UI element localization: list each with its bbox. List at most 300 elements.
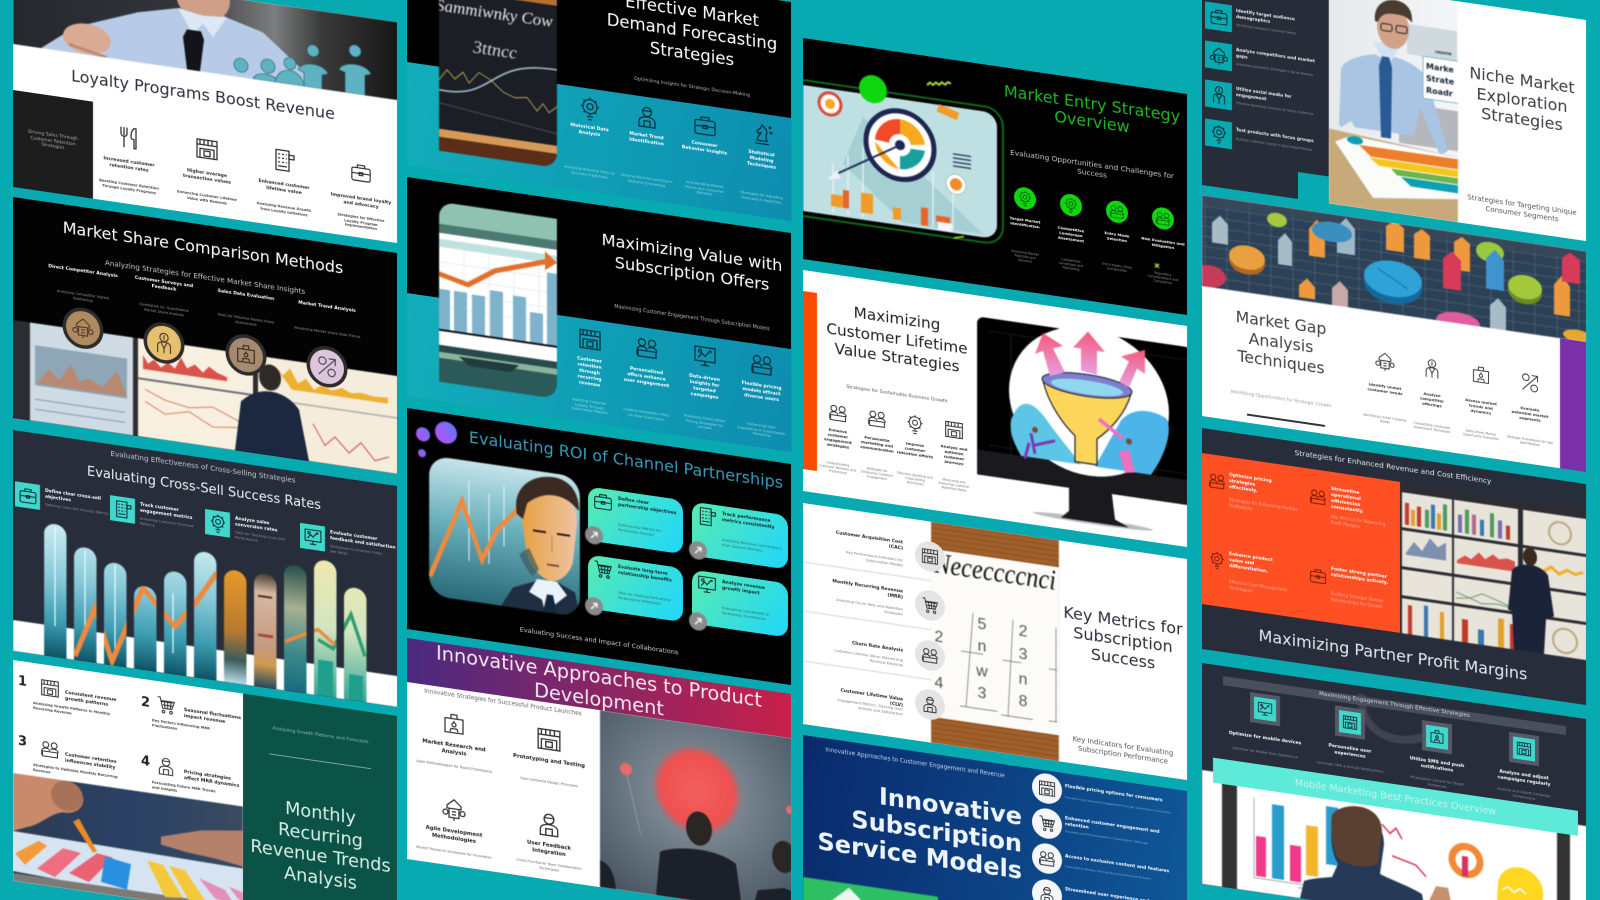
teal title band xyxy=(1213,758,1578,836)
decorative purple circles xyxy=(415,420,458,458)
item: market segments: segments xyxy=(1519,415,1541,423)
item: define objectives: Define clear cross-sell objectives xyxy=(45,489,101,503)
item: personalized offers: for New Subscribers xyxy=(628,412,665,422)
item: prototyping: Prototyping and Testing xyxy=(513,753,585,770)
item: customer lifetime value xyxy=(256,148,312,217)
item: user feedback: Cross-Functional Team Collaboration Techniques xyxy=(516,857,582,872)
method: sales data: Tools for Effective Market Share Assessment xyxy=(218,312,274,327)
item 1 xyxy=(18,674,116,716)
item: higher transaction value: Enhancing Customer Lifetime Value with Rewards xyxy=(177,189,237,205)
item: market trend: Market Trend xyxy=(629,132,664,142)
item: market segments: potential market xyxy=(1512,409,1548,419)
item: analyze journeys: Analyze and optimize customer journeys xyxy=(941,443,967,466)
item: optimize pricing: Strategies for Enhancing Partner Profitability xyxy=(1229,497,1297,512)
item: user feedback xyxy=(516,814,582,872)
photo: man with financial chart xyxy=(428,457,581,616)
method: direct competitor: Direct Competitor Analysis xyxy=(48,264,118,279)
title: Maximizing xyxy=(854,303,940,334)
item: customer lifetime value: Analyzing Revenue Growth from Loyalty Initiatives xyxy=(257,201,311,217)
panel: Market Gap Analysis Techniques slide xyxy=(1202,195,1586,472)
card: track metrics xyxy=(692,502,788,570)
item: retention: Customer xyxy=(577,356,602,365)
item: streamline efficiencies: Streamline operational efficiencies consistently. xyxy=(1331,487,1364,514)
item: unmet needs xyxy=(1361,346,1409,433)
subtitle: Strategies for Targeting Unique Consumer Segments xyxy=(1467,193,1577,223)
item 3: 3 xyxy=(18,734,27,750)
item: personalized offers: Personalized xyxy=(630,367,663,377)
item: mobile devices: Optimize for Mobile User Experience xyxy=(1232,746,1298,760)
item: fosters relationships: Foster strong partner relationships actively. xyxy=(1331,567,1388,586)
item: analyze conversion: Analyze sales conversion rates xyxy=(235,516,277,533)
item: mobile devices: Optimize for mobile devices xyxy=(1229,731,1301,747)
item: retention: retention xyxy=(577,362,602,371)
method: direct competitor: Analyzing Competitor Market Positioning xyxy=(57,289,109,303)
item: personalize: experiences xyxy=(1334,750,1366,760)
item: competitor offerings xyxy=(1408,353,1456,440)
metric: CLV xyxy=(805,665,946,731)
item: retention: through xyxy=(579,368,600,376)
item: increased retention xyxy=(99,126,159,195)
panel: Loyalty Programs Boost Revenue slide xyxy=(13,0,397,243)
teal corner block xyxy=(1298,172,1329,204)
teal lower band xyxy=(407,293,792,452)
chart: pill bars filled with photo xyxy=(13,523,398,707)
item: market trends: Data-Driven Market Opportunity Evaluation xyxy=(1463,428,1499,441)
item: higher transaction value xyxy=(177,138,237,205)
item: enhance product: Enhance product value and differentiation. xyxy=(1229,552,1273,574)
metric: CAC: Customer Acquisition Cost (CAC) xyxy=(836,531,903,551)
title: Niche Market Exploration Strategies xyxy=(1469,63,1575,134)
item: market trend xyxy=(620,106,672,188)
item: data-driven: Pricing Strategies for xyxy=(686,418,723,428)
item: market segments: Evaluate xyxy=(1520,405,1540,413)
item: agile development: Agile Development Methodologies xyxy=(426,825,482,845)
panel: Market Entry Strategy Overview slide xyxy=(803,38,1187,315)
card: growth impact: Evaluating Cost-Benefit of Partnership Investments xyxy=(722,606,769,621)
photo: man viewing chart wall xyxy=(13,320,398,474)
item: personalized offers: offers enhance xyxy=(627,372,666,383)
title xyxy=(803,772,1022,885)
metric: churn xyxy=(805,616,946,682)
title: Demand Forecasting xyxy=(607,10,777,54)
item: brand loyalty: Implementation xyxy=(345,223,377,231)
item: track engagement xyxy=(110,495,194,528)
item: data-driven: campaigns xyxy=(691,391,718,400)
metric: churn: Churn Rate Analysis xyxy=(852,641,903,654)
item: statistical modeling xyxy=(740,124,783,205)
photo: 3D chart blocks on circuit board xyxy=(1202,195,1587,342)
item: competitor offerings: Analyze xyxy=(1423,391,1441,398)
item: market trends: dynamics xyxy=(1471,408,1491,416)
item: target market: Assessing Market Potential and Demand xyxy=(1011,249,1039,264)
side panel with subtitle: Driving Sales Through Customer Retention Strategies xyxy=(28,130,78,151)
right panel: Analyzing Growth Patterns and Forecasts xyxy=(272,726,369,745)
teal lower band xyxy=(407,62,792,221)
item 2: Key Factors Influencing MRR Fluctuations xyxy=(152,718,210,731)
panel: Maximizing Value with Subscription Offers slide xyxy=(407,177,791,452)
panel: Niche Market Exploration Strategies slide xyxy=(1202,0,1586,241)
title: Customer Lifetime xyxy=(826,319,968,357)
subtitle: Key Indicators for Evaluating Subscription Performance xyxy=(1073,735,1173,765)
item 1: Consistent revenue growth patterns xyxy=(65,691,116,708)
item: personalize marketing: Strategies for Enhancing Customer Engagement xyxy=(861,466,893,481)
item: analyze competitors: Analyze competitors and market gaps xyxy=(1236,48,1315,64)
title: Market Share Comparison Methods xyxy=(63,218,343,278)
photo: man with strategy roadmap xyxy=(1329,0,1458,222)
item: personalized offers: user engagement xyxy=(624,378,669,389)
photo: handwritten table on wood desk: 8 xyxy=(1019,692,1027,711)
item: entry mode xyxy=(1096,196,1138,284)
title: Evaluating Cross-Sell Success Rates xyxy=(87,464,321,513)
photo: hand with pencil on bar chart xyxy=(13,772,244,900)
item: personalize marketing: Personalize marketing and communication xyxy=(860,434,894,454)
item: flexible pricing: models attract xyxy=(742,387,781,398)
item: historical data: Analysis xyxy=(579,130,600,138)
item: entry mode: Entry Mode Selection xyxy=(1104,230,1130,243)
item: competitive landscape xyxy=(1050,189,1092,277)
card: track metrics: Track performance metrics consistently xyxy=(722,512,775,530)
illustration: target dartboard with arrow xyxy=(803,74,1005,244)
item: brand loyalty: Loyalty Program xyxy=(344,218,378,227)
method: customer surveys xyxy=(134,275,194,364)
right panel: Monthly xyxy=(285,799,356,829)
item: enhance product xyxy=(1208,549,1303,605)
card: define objectives: Define clear partnership objectives xyxy=(618,497,676,516)
item: risk evaluation: Regulatory Considerations and Compliance xyxy=(1148,271,1178,286)
method: sales data xyxy=(218,288,274,376)
item 2 xyxy=(141,695,242,731)
metric: CLV: Customer Lifetime Value (CLV) xyxy=(841,688,903,708)
photo: man with strategy roadmap: Roadr xyxy=(1426,86,1453,99)
item: evaluate feedback: Evaluate customer feedback and satisfaction xyxy=(330,530,396,551)
item: target market: Target Market Identification xyxy=(1010,215,1040,230)
right panel: Analysis xyxy=(284,863,357,894)
item: data-driven: targeted xyxy=(693,386,716,394)
item: consumer behavior: Behavior xyxy=(697,191,712,197)
item: analyze campaigns: Analyze and adjust xyxy=(1499,770,1549,782)
item: prototyping: User-Centered Design Principles xyxy=(520,776,578,789)
item: target demographics: Identifying Untapped Consumer Needs xyxy=(1236,23,1296,36)
item: social media xyxy=(1205,79,1327,124)
item: personalize marketing xyxy=(858,404,896,500)
item: unmet needs: Identify unmet customer needs xyxy=(1367,381,1403,396)
item 4 xyxy=(141,754,240,794)
item: fosters relationships xyxy=(1309,564,1397,618)
teal title band: Mobile Marketing Best Practices Overview xyxy=(1295,778,1496,818)
item: statistical modeling: Statistical xyxy=(748,150,775,159)
panel: Effective Market Demand Forecasting slide xyxy=(407,0,791,221)
item 3 xyxy=(18,734,118,779)
photo: handwritten table on wood desk: 4 xyxy=(935,673,943,692)
item: competitor offerings: offerings xyxy=(1422,401,1442,408)
item: market segments xyxy=(1506,367,1554,454)
item: consumer behavior: Behavior Insights xyxy=(682,145,727,157)
panel: Evaluating Cross-Sell Success Rates slide xyxy=(13,430,397,707)
metric: churn: Customer Lifetime Value: Maximizing Revenue Potential xyxy=(834,649,903,667)
item: market research: Market Research and Analysis xyxy=(422,738,486,758)
accent bar xyxy=(803,291,817,471)
item: competitive landscape: Competitive Landscape Assessment xyxy=(1058,225,1084,244)
photo: businessman with teal people figures xyxy=(13,0,398,101)
item: higher transaction value: Higher average transaction values xyxy=(183,169,231,186)
item: improve retention: Effective Upselling and Cross-Selling Techniques xyxy=(897,471,933,487)
photo: handwritten table on wood desk: w xyxy=(975,661,988,681)
item 2: 2 xyxy=(141,695,150,711)
subtitle: Maximizing Customer Engagement Through Subscription Models xyxy=(614,305,770,332)
panel: Market Share Comparison Methods slide xyxy=(13,197,397,474)
item: user feedback: Integration xyxy=(532,847,566,858)
card: track metrics: Analyzing Revenue Contributions from Channel Partners xyxy=(722,538,782,553)
method: market trend: Market Trend Analysis xyxy=(298,301,356,314)
title: Market Gap Analysis Techniques xyxy=(1236,307,1326,378)
item: customer lifetime value: Enhanced customer lifetime value xyxy=(258,179,310,196)
item: social media: Effective Marketing Channels for Niche Audiences xyxy=(1236,101,1313,116)
orange panel xyxy=(1202,453,1400,633)
item: evaluate feedback: Techniques to Improve Cross-Sell Rates xyxy=(330,544,383,556)
card: growth impact: Analyze revenue growth impact xyxy=(722,580,765,596)
subtitle: Evaluating Effectiveness of Cross-Selling Strategies xyxy=(110,449,296,485)
item: risk evaluation: Risk Evaluation and Mitigation xyxy=(1141,235,1185,250)
item: flexible pricing: Marketing xyxy=(753,432,770,438)
item: target demographics xyxy=(1205,1,1327,46)
title xyxy=(812,297,982,380)
item: prototyping xyxy=(513,728,585,789)
item: focus groups: Building Customer Loyalty in Specialized Markets xyxy=(1236,137,1312,152)
item: consumer behavior: Incorporating Market xyxy=(686,180,723,189)
item: analyze conversion xyxy=(204,509,285,542)
item: target market xyxy=(1004,182,1046,270)
item: retention: Boosting Customer xyxy=(572,397,607,406)
item: personalized offers: Crafting Irresistible Offers xyxy=(623,407,670,418)
item: statistical modeling: Strategies for Adjusting Forecasts in Real-Time xyxy=(740,190,783,205)
item: competitor offerings: Competitive Landscape Assessment Techniques xyxy=(1414,421,1450,434)
metric: CAC xyxy=(805,517,946,583)
star decoration xyxy=(948,229,1163,301)
photo: man with strategy roadmap: Strate xyxy=(1426,74,1455,87)
method: sales data: Sales Data Evaluation xyxy=(218,289,274,302)
item: enhance product: Effective Cost Management Techniques xyxy=(1229,579,1287,593)
photo: handwritten table on wood desk: 2 xyxy=(935,627,943,646)
photo: man with strategy roadmap: CREATIN xyxy=(1435,50,1452,56)
photo: handwritten table on wood desk: 5 xyxy=(978,615,986,634)
item: agile development xyxy=(416,798,492,860)
item 1: 1 xyxy=(18,674,27,690)
card: long-term benefits: Evaluate long-term relationship benefits xyxy=(618,565,672,584)
item: flexible pricing: Enhancing User xyxy=(747,422,776,430)
item: flexible pricing: Experience in Subscription xyxy=(738,425,785,436)
photo: handwritten table on wood desk: 3 xyxy=(978,684,986,703)
photo: man with strategy roadmap: Marke xyxy=(1426,62,1454,75)
item: competitive landscape: Competitive Landscape and Positioning xyxy=(1059,257,1083,272)
photo: handwritten table on wood desk: n xyxy=(1019,670,1027,689)
item: historical data: Analyzing Historical Data for Accurate Predictions xyxy=(564,164,615,179)
card: long-term benefits: Tools for Tracking Partnership Performance Effectively xyxy=(618,591,671,606)
card: define objectives xyxy=(588,486,683,554)
item: statistical modeling: Modeling xyxy=(750,156,773,165)
accent bar xyxy=(1560,338,1587,472)
metric: MRR xyxy=(805,566,946,632)
item 4: Pricing strategies affect MRR dynamics xyxy=(184,770,239,789)
item: retention: Subscription Models xyxy=(571,406,608,416)
title: Key Metrics for Subscription Success xyxy=(1063,602,1183,673)
item: enhance engagement: Enhance customer engagement strategies xyxy=(824,427,852,450)
subtitle: Evaluating Opportunities and Challenges for Success xyxy=(1010,148,1174,181)
right panel: Revenue Trends xyxy=(250,837,391,877)
feature: customer engagement: Enhanced customer engagement and retention xyxy=(1065,816,1159,835)
dark left panel xyxy=(1202,0,1329,204)
item: consumer behavior: Trends and Consumer xyxy=(685,184,724,194)
metric: CLV: Engagement Metrics: Tracking User Activity and Satisfaction xyxy=(838,698,903,716)
item: SMS and push: Audiences xyxy=(1428,782,1446,789)
top banner xyxy=(1223,676,1566,735)
item: brand loyalty: Strategies for Effective xyxy=(337,212,384,223)
item: enhance engagement: Understanding Customer Behavior and Preferences xyxy=(820,460,856,475)
item: entry mode: Entry Modes, Risks and Benefits xyxy=(1102,261,1132,273)
item: analyze conversion: Tools for Tracking Cross-Sell Performance xyxy=(235,530,285,542)
title: Strategies xyxy=(650,38,734,69)
method: market trend: Visualizing Market Share Data Trends xyxy=(294,326,360,339)
item: flexible pricing xyxy=(738,354,786,438)
arrow buttons xyxy=(584,526,708,632)
item: personalized offers xyxy=(623,338,670,422)
illustration: monitor with bar chart and arrow xyxy=(438,202,558,398)
method: market trend xyxy=(294,300,360,388)
subtitle: Strategies for Enhanced Revenue and Cost Efficiency xyxy=(1295,448,1491,486)
metric: CAC: Key Performance Indicators for Subscription Models xyxy=(846,550,903,567)
item: consumer behavior: Consumer xyxy=(692,141,717,149)
item: agile development: Market Research Strategies for Innovation xyxy=(416,845,492,860)
photo: handwritten table on wood desk: 3 xyxy=(1019,645,1027,664)
item: track engagement: Analyzing Customer Purchase Patterns xyxy=(140,517,194,528)
divider line xyxy=(1247,414,1325,427)
title: Maximizing Value with Subscription Offers xyxy=(602,229,782,294)
item 4: 4 xyxy=(141,754,150,770)
item: market trends xyxy=(1457,360,1505,447)
item: consumer behavior xyxy=(682,116,728,197)
card: define objectives: Defining Key Metrics for Partnership Success xyxy=(618,523,661,537)
item 1: Analyzing Growth Patterns in Monthly Recurring Revenue xyxy=(33,701,110,716)
item: enhance engagement xyxy=(819,398,857,494)
feature: customer engagement: Flexibility and Personalization in Subscription Offerings xyxy=(1065,829,1148,845)
panel: Maximizing Partner Profit Margins slide xyxy=(1202,428,1586,705)
item: market trend: Utilizing Machine Learning in Demand Forecasting xyxy=(621,172,672,188)
item: evaluate feedback xyxy=(300,522,396,556)
panel: Innovative Subscription Service Models slide xyxy=(803,735,1187,900)
title: Innovative xyxy=(879,782,1022,831)
item: historical data: Historical Data xyxy=(570,123,609,134)
item 2: Seasonal fluctuations impact revenue xyxy=(184,708,241,725)
item: brand loyalty xyxy=(330,164,392,231)
item: optimize pricing: Optimize pricing strategies effectively. xyxy=(1229,473,1272,494)
item: market research xyxy=(416,713,492,774)
item: personalize: Leverage SMS and Push Notifications xyxy=(1317,760,1383,774)
item: target demographics: Identify target audience demographics xyxy=(1236,9,1295,24)
item: SMS and push: Personalize Content for Target xyxy=(1410,775,1464,786)
title: Service Models xyxy=(818,827,1022,885)
item: risk evaluation xyxy=(1141,202,1185,291)
method: customer surveys: Customer Surveys and Feedback xyxy=(135,276,193,293)
item: market trend: Identification xyxy=(629,137,664,147)
card: long-term benefits xyxy=(588,554,683,622)
item: SMS and push xyxy=(1396,716,1478,794)
item: SMS and push: notifications xyxy=(1421,764,1453,774)
item: analyze campaigns: campaigns regularly xyxy=(1498,775,1550,788)
item: flexible pricing: diverse users xyxy=(744,393,779,403)
item: track engagement: Track customer engagement metrics xyxy=(140,503,192,521)
item: retention: Loyalty Through xyxy=(575,402,604,410)
item: personalize xyxy=(1309,702,1391,780)
photo: handwritten table on wood desk xyxy=(931,522,1059,761)
lower image area xyxy=(1202,770,1587,900)
photo: handwritten table on wood desk: n xyxy=(978,637,986,656)
side panel with subtitle xyxy=(13,90,93,199)
item: retention: recurring xyxy=(577,374,602,382)
item: analyze campaigns: Analyze and Adjust Campaign xyxy=(1497,786,1551,798)
item: brand loyalty: Improved brand loyalty and advocacy xyxy=(331,192,391,210)
item: retention: revenue xyxy=(579,380,600,388)
method: direct competitor xyxy=(48,264,118,350)
subtitle: Innovative Approaches to Customer Engagement and Revenue xyxy=(825,747,1005,779)
item: analyze journeys: Measuring and Analyzing Customer Retention Rates xyxy=(938,477,970,493)
photo: man viewing dashboards xyxy=(1400,482,1587,660)
photo: chalkboard with handwritten chart xyxy=(438,0,558,167)
feature: exclusive content: Access to exclusive content and features xyxy=(1065,854,1169,874)
panel: Mobile Marketing Best Practices slide xyxy=(1202,663,1586,900)
item: streamline efficiencies xyxy=(1309,484,1397,538)
panel: Monthly Recurring Revenue Trends slide xyxy=(13,660,397,900)
title: Evaluating ROI of Channel Partnerships xyxy=(469,428,783,492)
metric: MRR: Analyzing Churn Rate and Retention Strategies xyxy=(836,598,903,616)
photo: handwritten table on wood desk: 2 xyxy=(1019,622,1027,641)
item: mobile devices xyxy=(1224,688,1306,766)
item: competitor offerings: competitor xyxy=(1420,395,1444,404)
item: personalize: Personalize user xyxy=(1329,744,1371,755)
item: social media: Utilize social media for engagement xyxy=(1236,87,1292,102)
footer subtitle: Evaluating Success and Impact of Collaborations xyxy=(520,625,678,657)
item: market trends: Assess market xyxy=(1465,397,1497,407)
item: retention xyxy=(571,328,608,416)
subtitle: Innovative Strategies for Successful Product Launches xyxy=(424,689,582,717)
metric: MRR: Monthly Recurring Revenue (MRR) xyxy=(832,579,903,600)
item: data-driven: Data-driven xyxy=(689,373,720,383)
item 3: Strategies to Optimize Monthly Recurring Revenue xyxy=(33,763,118,779)
item: increased retention: Increased customer retention rates xyxy=(103,156,155,174)
item: unmet needs: Identifying Unmet Customer Needs xyxy=(1363,412,1407,424)
photo: chalkboard with handwritten chart: 3ttncc xyxy=(472,37,517,63)
card: growth impact xyxy=(692,570,788,638)
item: user feedback: User Feedback xyxy=(527,840,571,852)
feature: exclusive content xyxy=(1032,841,1187,894)
item: SMS and push: Utilize SMS and push xyxy=(1410,756,1464,769)
feature: flexible pricing: Transforming Consumer Engagement Through Subscription Innovation xyxy=(1065,795,1171,815)
background arc decoration xyxy=(1322,681,1462,771)
feature: flexible pricing: Flexible pricing options for consumers xyxy=(1065,784,1163,803)
item: increased retention: Boosting Customer Retention Through Loyalty Programs xyxy=(99,178,159,195)
green image block xyxy=(803,877,938,900)
subtitle: Identifying Opportunities for Strategic Growth xyxy=(1231,390,1331,409)
method: customer surveys: Qualitative vs. Quantitative Market Share Analysis xyxy=(139,302,189,317)
feature: streamlined experience xyxy=(1032,877,1187,900)
item: market segments: Strategic Frameworks for Gap Identification xyxy=(1507,434,1553,447)
item: data-driven: insights for xyxy=(690,379,719,389)
item: define objectives xyxy=(15,481,109,516)
item: data-driven: Success xyxy=(697,425,712,431)
item: improve retention: Improve customer retention efforts xyxy=(897,441,933,459)
title: Value Strategies xyxy=(834,339,960,376)
item: data-driven xyxy=(684,345,725,431)
item 3: Customer retention influences stability xyxy=(65,753,117,771)
item: analyze campaigns: Performance xyxy=(1513,793,1535,801)
